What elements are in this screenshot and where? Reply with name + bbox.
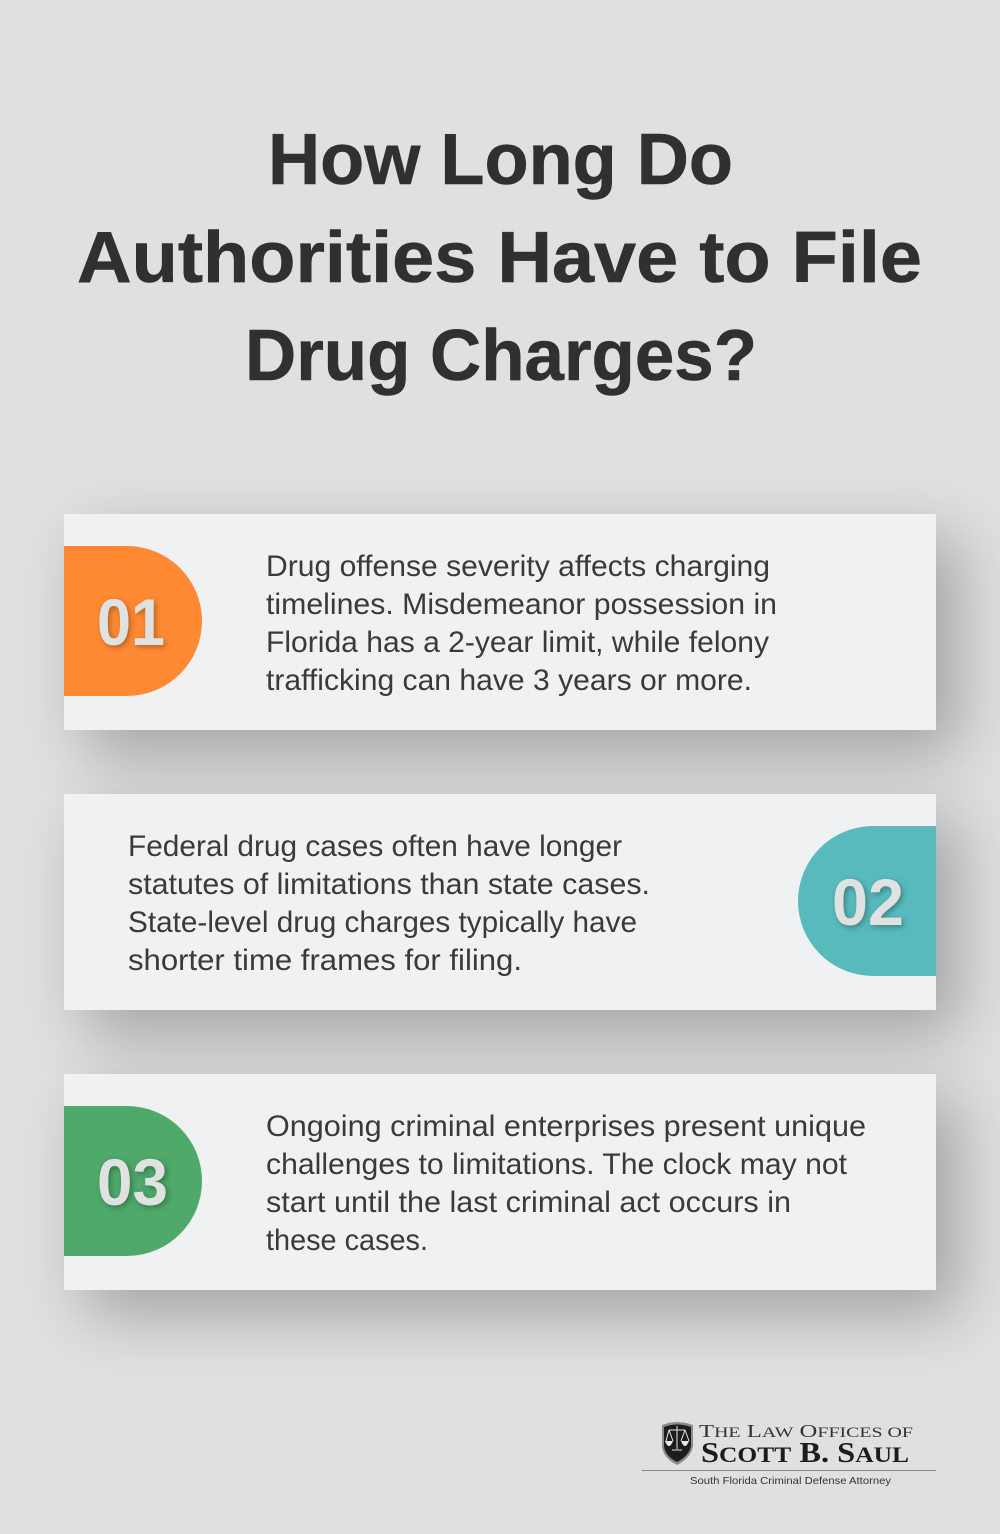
- title: [77, 120, 922, 396]
- number 03: 03: [97, 1145, 168, 1219]
- title: Drug Charges?: [245, 316, 757, 396]
- badge 02 background: [798, 826, 936, 976]
- logo: [642, 1421, 936, 1487]
- text block: card 1: Florida has a 2-year limit, while felony: [266, 626, 769, 659]
- badge 01 background: [64, 546, 202, 696]
- number 01: 01: [97, 585, 165, 659]
- text block: card 1: trafficking can have 3 years or more.: [266, 664, 752, 697]
- panel: card 1: [64, 514, 936, 730]
- badge 03 background: [64, 1106, 202, 1256]
- text block: card 2: Federal drug cases often have longer: [128, 830, 622, 863]
- text block: card 1: timelines. Misdemeanor possession in: [266, 588, 777, 621]
- text block: card 3: Ongoing criminal enterprises present unique: [266, 1110, 866, 1143]
- number 02: 02: [832, 865, 904, 939]
- text block: card 1: [266, 550, 777, 697]
- text block: card 2: statutes of limitations than state cases.: [128, 868, 650, 901]
- title: Authorities Have to File: [77, 218, 922, 298]
- text block: card 2: State-level drug charges typically have: [128, 906, 637, 939]
- text block: card 3: start until the last criminal act occurs in: [266, 1186, 791, 1219]
- icon: shield with scales: [662, 1422, 693, 1465]
- panel: card 3: [64, 1074, 936, 1290]
- logo line: the law offices of: T HE L AW O FFICES OF: [699, 1421, 913, 1441]
- logo tagline: South Florida Criminal Defense Attorney: [690, 1475, 892, 1487]
- text block: card 2: [128, 830, 650, 977]
- panel: card 2: [64, 794, 936, 1010]
- logo line: scott b. saul: SCOTT B. S AUL: [701, 1438, 909, 1469]
- text block: card 1: Drug offense severity affects charging: [266, 550, 770, 583]
- text block: card 3: these cases.: [266, 1224, 428, 1257]
- text block: card 3: challenges to limitations. The clock may not: [266, 1148, 848, 1181]
- text block: card 2: shorter time frames for filing.: [128, 944, 522, 977]
- title: How Long Do: [268, 120, 733, 200]
- text block: card 3: [266, 1110, 866, 1257]
